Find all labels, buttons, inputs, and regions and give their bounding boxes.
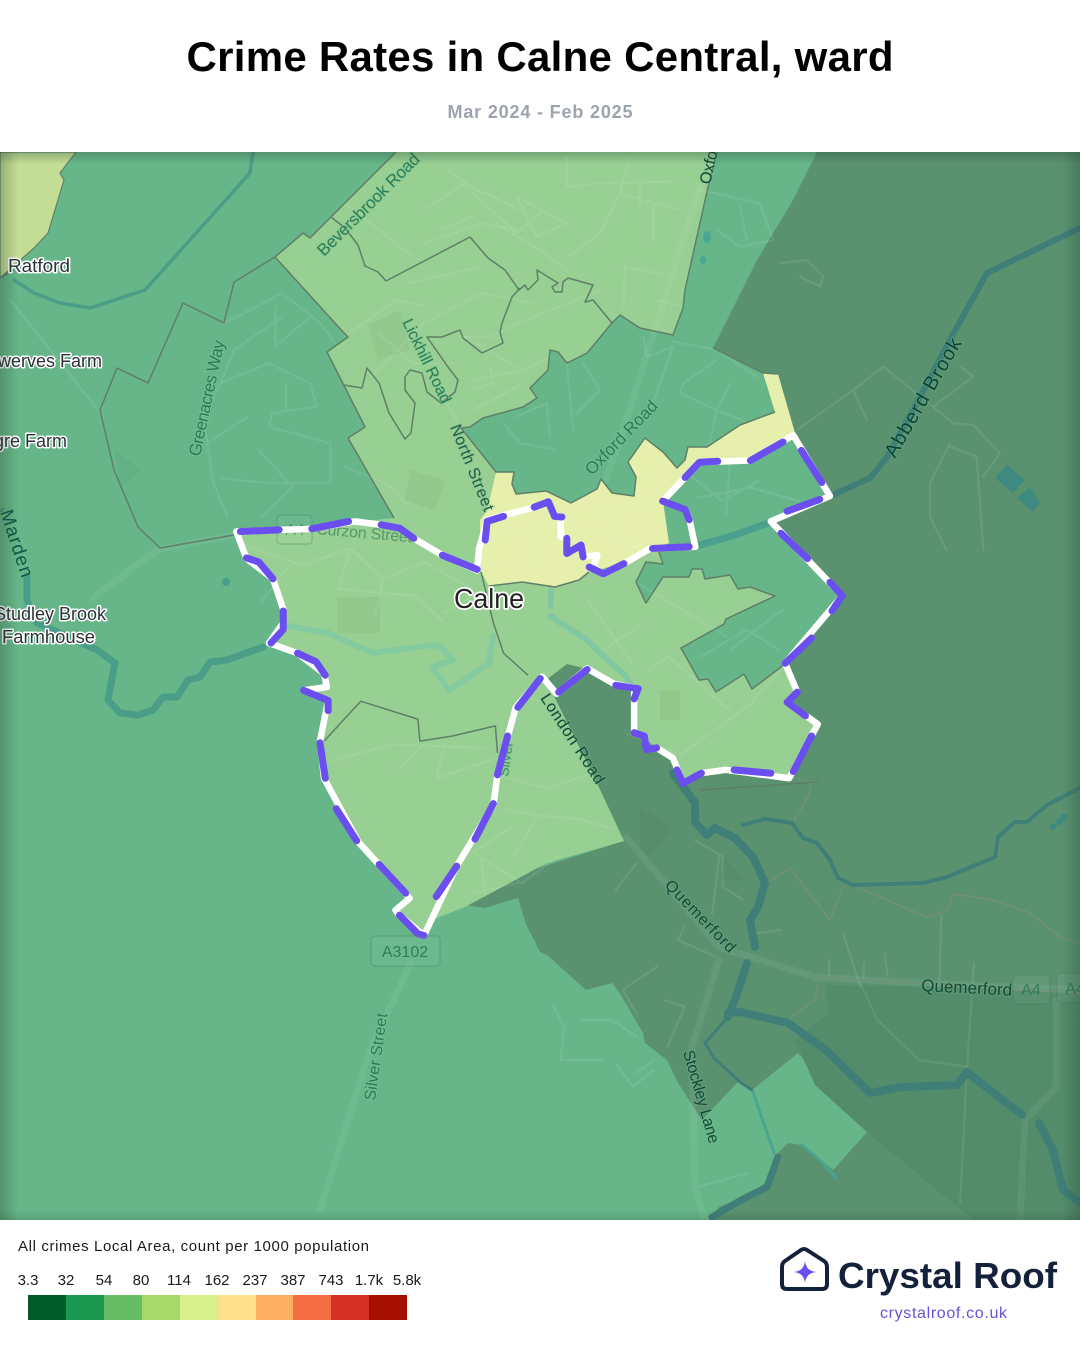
legend scale labels: 387 bbox=[280, 1272, 306, 1289]
water: river through town east bbox=[550, 590, 634, 690]
road label: Greenacres Way: Greenacres Way bbox=[185, 338, 229, 458]
website address: crystalroof.co.uk bbox=[880, 1305, 1008, 1322]
road label: London Road: London Road bbox=[537, 691, 608, 787]
map area: medium crime base bbox=[0, 152, 867, 1220]
legend scale labels: 162 bbox=[204, 1272, 230, 1289]
road network bbox=[10, 157, 1080, 1220]
road label: Oxford Road: Oxford Road bbox=[581, 397, 662, 479]
legend scale labels bbox=[18, 1272, 422, 1289]
subtitle: date range: Mar 2024 - Feb 2025 bbox=[448, 102, 632, 122]
place label: Quemerford diagonal: Quemerford bbox=[661, 877, 739, 956]
map area: light green zone bbox=[236, 152, 818, 935]
road shield: A4 on Curzon Street bbox=[277, 515, 312, 544]
water: river through town west bbox=[289, 626, 493, 690]
place label: Quemerford east: Quemerford bbox=[921, 976, 1013, 1000]
legend scale labels: 743 bbox=[318, 1272, 344, 1289]
water: channel at bottom bbox=[712, 1157, 778, 1217]
logo: Crystal Roof bbox=[782, 1249, 1058, 1322]
legend scale labels: 3.3 bbox=[18, 1272, 38, 1289]
map area: darkest south-east zone bbox=[804, 1060, 867, 1132]
map area: eastern medium zone inside ward bbox=[659, 440, 838, 691]
road shield: A3102 bbox=[371, 936, 440, 966]
legend scale labels: 5.8k bbox=[393, 1272, 422, 1289]
ward and zone boundary lines bbox=[0, 152, 818, 790]
water: Abberd Brook bbox=[833, 228, 1080, 495]
road label: Silver Street: Silver Street bbox=[362, 1012, 391, 1102]
water: lower river bbox=[673, 773, 1080, 1203]
legend bbox=[18, 1238, 422, 1320]
road label: Stockley Lane: Stockley Lane bbox=[679, 1048, 722, 1145]
icon: house outline bbox=[782, 1249, 827, 1289]
icon: crystal star bbox=[794, 1261, 816, 1283]
road label: Lickhill Road: Lickhill Road bbox=[398, 316, 454, 406]
road shield: A4 east: A4 bbox=[1021, 982, 1041, 999]
map area: low crime dark zone bbox=[465, 152, 1080, 1220]
place label: Ratford: Ratford bbox=[8, 256, 70, 276]
water: north branch to east bbox=[743, 788, 1080, 885]
water: north-west stream bbox=[14, 152, 253, 308]
legend scale labels: 32 bbox=[58, 1272, 74, 1289]
ward outline: white base bbox=[236, 435, 842, 935]
ward outline: violet dashes bbox=[240, 442, 842, 935]
logo wordmark: Crystal Roof bbox=[838, 1255, 1058, 1296]
water: western brook bbox=[27, 576, 263, 715]
road shield: A4 far east bbox=[1057, 973, 1080, 1002]
road label: North Street: North Street bbox=[446, 422, 497, 514]
map area: yellow high crime zone bbox=[480, 373, 795, 587]
legend scale labels: 54 bbox=[96, 1272, 112, 1289]
water: thin branch south bbox=[705, 1017, 752, 1090]
place label: Studley Brook Farmhouse bbox=[0, 604, 107, 647]
road label: Curzon Street: Curzon Street bbox=[316, 521, 413, 546]
road label: Oxford Road north: Oxford Road bbox=[697, 94, 734, 186]
water label: Abberd Brook: Abberd Brook bbox=[880, 334, 967, 462]
water: brook through ward bbox=[700, 522, 771, 545]
map vignette bbox=[0, 152, 1080, 1220]
road shield: A3102: A3102 bbox=[382, 944, 428, 961]
rivers and brooks bbox=[14, 152, 1080, 1217]
road label: Beversbrook Road: Beversbrook Road bbox=[313, 150, 424, 260]
legend title: All crimes Local Area, count per 1000 population bbox=[18, 1238, 369, 1255]
legend scale labels: 1.7k bbox=[355, 1272, 384, 1289]
place label: Calne: Calne bbox=[454, 583, 524, 614]
ponds bbox=[222, 231, 1068, 830]
building and field patches bbox=[115, 310, 743, 880]
road shield: A4 on Curzon Street: A4 bbox=[285, 522, 305, 539]
place label: Studley Brook Farmhouse: Farmhouse bbox=[2, 627, 95, 647]
legend colour bar bbox=[28, 1295, 407, 1320]
road shield: A4 east bbox=[1013, 975, 1050, 1004]
water: stream in lower pocket bbox=[753, 1092, 836, 1178]
legend scale labels: 80 bbox=[133, 1272, 149, 1289]
footpaths bbox=[767, 778, 1080, 1017]
legend scale labels: 237 bbox=[242, 1272, 268, 1289]
road label: Silver Street in town: Silver bbox=[495, 740, 516, 777]
title: Crime Rates in Calne Central, ward bbox=[186, 33, 894, 80]
map area: top-left lighter zone bbox=[0, 152, 76, 278]
legend scale labels: 114 bbox=[167, 1272, 191, 1289]
